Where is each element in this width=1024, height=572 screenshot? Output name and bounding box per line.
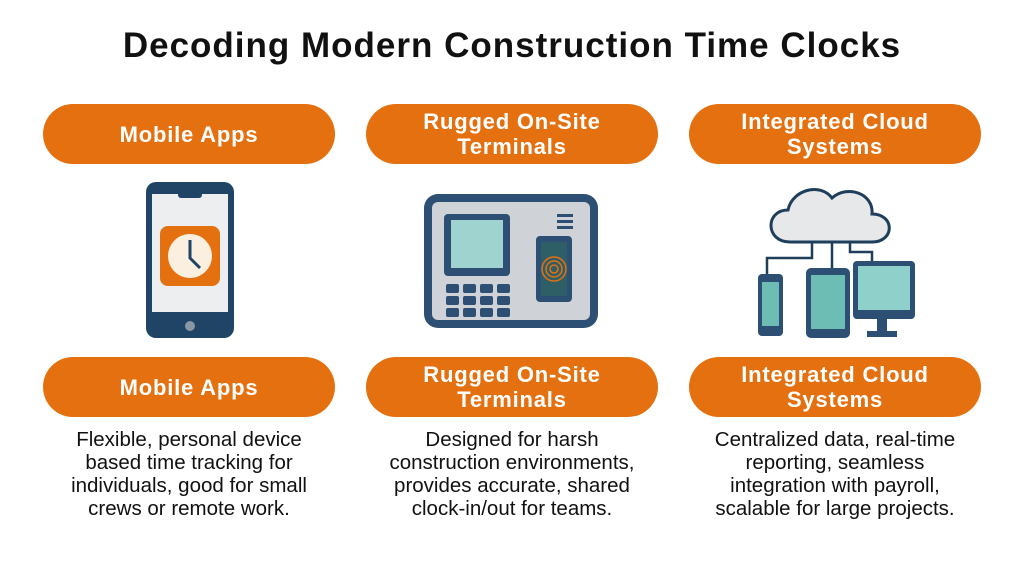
text: terminals description: clock-in/out for teams.: [412, 497, 612, 520]
pill: rugged terminals top: [366, 104, 658, 164]
pill: rugged terminals bottom: Terminals: [457, 387, 567, 412]
pill: cloud bottom: [689, 357, 981, 417]
text: mobile apps description: based time tracking for: [85, 451, 293, 474]
pill: rugged terminals bottom: [366, 357, 658, 417]
text: terminals description: Designed for harsh: [425, 428, 599, 451]
pill: cloud top: [689, 104, 981, 164]
text: terminals description: construction environments,: [390, 451, 634, 474]
text: cloud description: scalable for large projects.: [715, 497, 955, 520]
text: cloud description: [715, 428, 955, 520]
text: terminals description: provides accurate, shared: [394, 474, 630, 497]
pill: mobile apps top: [43, 104, 335, 164]
icon: rugged terminal: [424, 194, 598, 328]
text: mobile apps description: [71, 428, 307, 520]
icon: cloud with devices: [758, 188, 915, 338]
text: mobile apps description: individuals, good for small: [71, 474, 307, 497]
pill: rugged terminals top: Terminals: [457, 134, 567, 159]
pill: rugged terminals bottom: Rugged On-Site: [423, 362, 601, 387]
pill: mobile apps top: Mobile Apps: [120, 122, 258, 146]
text: cloud description: Centralized data, real-time: [715, 428, 955, 451]
pill: rugged terminals top: Rugged On-Site: [423, 109, 601, 134]
pill: cloud top: Integrated Cloud: [741, 109, 929, 134]
text: cloud description: reporting, seamless: [746, 451, 924, 474]
text: mobile apps description: Flexible, personal device: [76, 428, 302, 451]
text: terminals description: [390, 428, 634, 520]
icon: phone with clock: [146, 182, 234, 338]
pill: mobile apps bottom: Mobile Apps: [120, 374, 258, 400]
pill: cloud bottom: Systems: [787, 387, 883, 412]
pill: mobile apps bottom: [43, 357, 335, 417]
text: mobile apps description: crews or remote work.: [88, 497, 290, 520]
pill: cloud bottom: Integrated Cloud: [741, 362, 929, 387]
title: Decoding Modern Construction Time Clocks: [123, 26, 901, 65]
text: cloud description: integration with payroll,: [730, 474, 940, 497]
pill: cloud top: Systems: [787, 134, 883, 159]
